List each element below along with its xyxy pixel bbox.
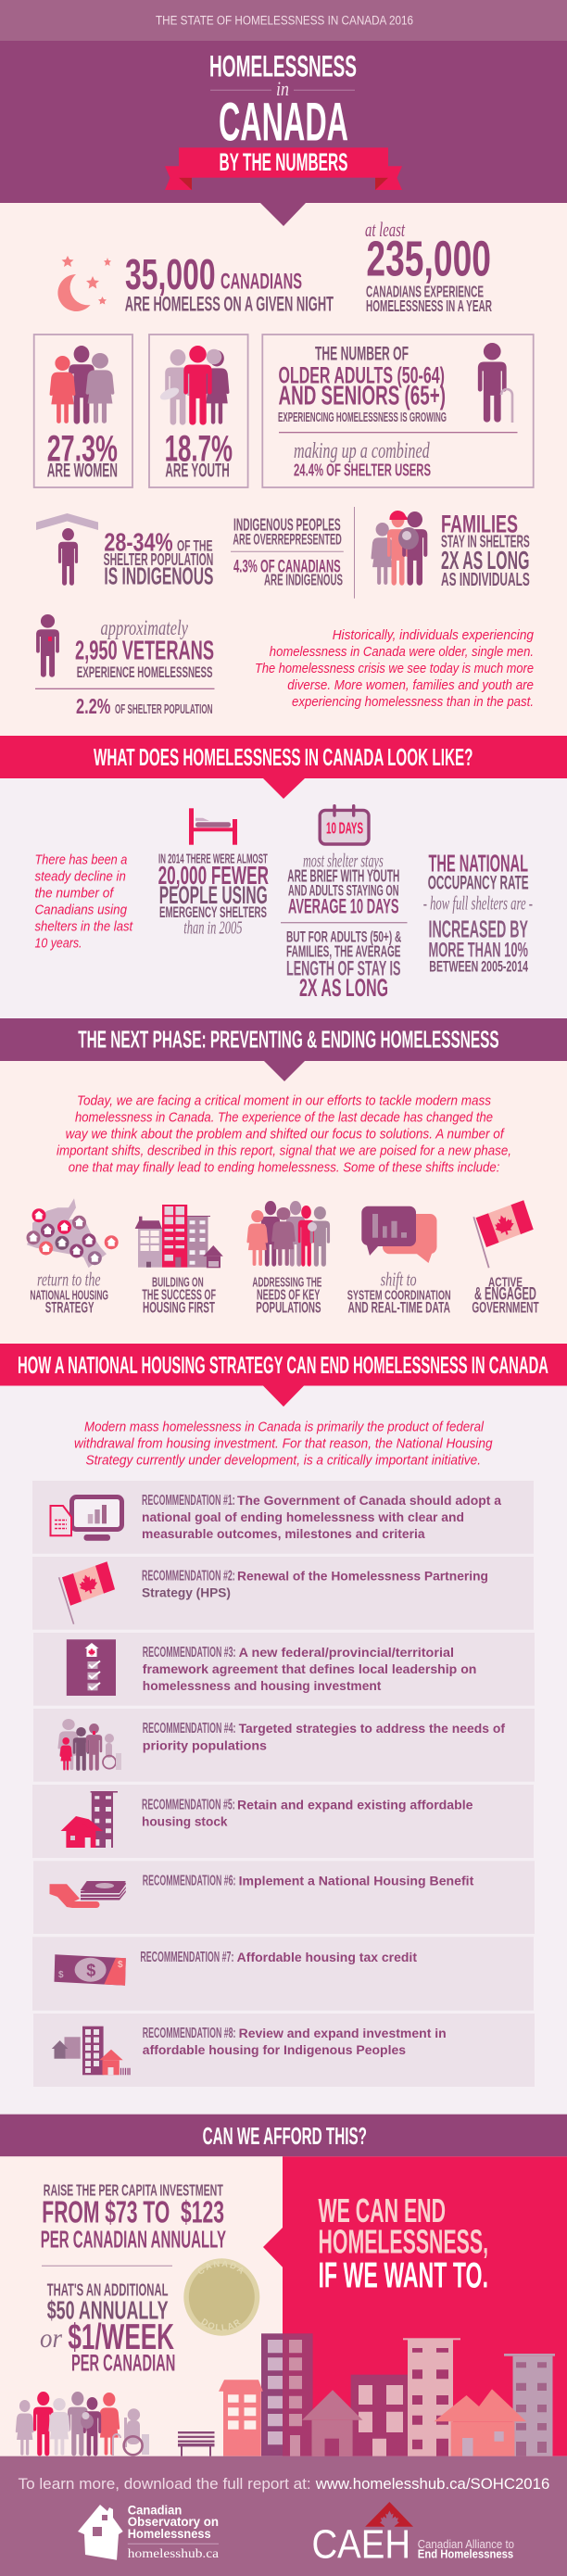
text: recommendation 5 (142, 1797, 473, 1828)
stat: veterans: OF SHELTER POPULATION (115, 702, 213, 717)
panel: older adults and seniors: THE NUMBER OF (315, 344, 409, 365)
text: raise the per capita investment: PER CANADIAN ANNUALLY (41, 2228, 226, 2254)
logo: CAEH: Canadian Alliance to (418, 2537, 514, 2551)
text block: steady decline (35, 853, 133, 952)
label: national housing strategy: NATIONAL HOUSING (30, 1289, 108, 1304)
text: recommendation 3 (143, 1645, 476, 1693)
label: active and engaged government: ACTIVE (488, 1274, 523, 1290)
panel: older adults and seniors (262, 335, 534, 487)
top banner: report name (0, 0, 567, 41)
text: recommendation 8: RECOMMENDATION #8: (143, 2026, 235, 2041)
icon: Canada map with house pins (26, 1198, 119, 1268)
icon: three women (50, 346, 114, 424)
panel: older adults and seniors: 24.4% OF SHELTER USERS (294, 460, 431, 479)
text: recommendation 7: RECOMMENDATION #7: (140, 1950, 233, 1965)
panel: older adults and seniors: AND SENIORS (65+) (278, 382, 446, 411)
text block: historically: The homelessness crisis we see today is much more (255, 662, 534, 676)
text: recommendation 6 (143, 1873, 474, 1888)
stat: indigenous overrepresented: ARE OVERREPRESENTED (233, 531, 342, 548)
label: national housing strategy: return to the (37, 1269, 100, 1291)
heading: can we afford this: CAN WE AFFORD THIS? (203, 2122, 367, 2150)
icon: Canada dollar coin: CANADA (198, 2261, 243, 2274)
panel: youth: 18.7% (165, 428, 233, 469)
label: housing first: HOUSING FIRST (143, 1299, 215, 1317)
stat: 235,000 in a year: 235,000 (366, 231, 491, 286)
label: key populations: POPULATIONS (256, 1299, 321, 1317)
stat: 20,000 fewer people: IN 2014 THERE WERE ALMOST (158, 852, 268, 867)
slogan: we can end homelessness (319, 2191, 488, 2295)
call to action link: www.homelesshub.ca/SOHC2016 (315, 2475, 549, 2493)
text: additional cost: or (40, 2323, 62, 2354)
slogan: we can end homelessness: WE CAN END (319, 2191, 446, 2229)
icon: bed (189, 808, 237, 845)
heading: can we afford this (0, 2115, 567, 2156)
panel: women (34, 335, 132, 487)
panel: older adults and seniors: OLDER ADULTS (50-64) (278, 362, 445, 388)
text block: modern mass homelessness: Strategy currently under development, is a critically important initiative. (85, 1453, 481, 1468)
stat: shelter stays: FAMILIES, THE AVERAGE (286, 941, 401, 960)
call to action link: To learn more, download the full report at: (19, 2475, 311, 2493)
icon: senior with cane (478, 343, 512, 423)
panel: recommendation 6 (33, 1861, 535, 1934)
stat: national occupancy rate (423, 850, 533, 976)
panel: recommendation 2 (32, 1557, 534, 1630)
stat: indigenous shelter population: OF THE (177, 537, 213, 554)
stat: shelter stays (281, 850, 408, 1002)
text: raise the per capita investment: RAISE THE PER CAPITA INVESTMENT (44, 2180, 223, 2199)
text: recommendation 3: RECOMMENDATION #3: (143, 1645, 235, 1661)
icon: indigenous housing buildings (52, 2027, 130, 2075)
logo: CAEH: End Homelessness (418, 2547, 513, 2561)
text block: critical moment: one that may finally lead to ending homelessness. Some of these shifts include: (69, 1161, 499, 1176)
text: recommendation 1: measurable outcomes, milestones and criteria (142, 1527, 425, 1541)
logo: Canadian Observatory on Homelessness: homelesshub.ca (128, 2546, 219, 2560)
icon: buildings (135, 1205, 223, 1268)
panel: cost callout on pink (0, 2156, 567, 2456)
text: raise the per capita investment (41, 2180, 226, 2254)
stat: families stay twice as long (441, 511, 530, 590)
title text: in (276, 77, 289, 100)
label: key populations: NEEDS OF KEY (257, 1287, 321, 1303)
logo: Canadian Observatory on Homelessness: Observatory on (128, 2514, 219, 2529)
text block: critical moment: Today, we are facing a critical moment in our efforts to tackle modern mass (77, 1094, 491, 1109)
text: recommendation 1: national goal of ending homelessness with clear and (142, 1510, 464, 1524)
label: housing first: THE SUCCESS OF (142, 1287, 216, 1303)
stat: indigenous shelter population: IS INDIGENOUS (104, 562, 213, 590)
text block: historically: Historically, individuals experiencing (333, 628, 534, 643)
stat: veterans: EXPERIENCE HOMELESSNESS (77, 663, 213, 681)
stat: 235,000 in a year: CANADIANS EXPERIENCE (366, 283, 484, 301)
stat: veterans (35, 614, 215, 718)
text block: historically (255, 628, 534, 710)
label: system coordination: AND REAL-TIME DATA (348, 1299, 450, 1317)
stat: indigenous shelter population: 28-34% (104, 527, 173, 556)
stat: veterans: approximately (100, 616, 189, 639)
text: additional cost: $50 ANNUALLY (47, 2296, 169, 2325)
icon: checklist (67, 1639, 116, 1696)
text block: steady decline: There has been a (35, 853, 127, 868)
illustration: city skyline (219, 2333, 555, 2456)
label: housing first: BUILDING ON (152, 1275, 204, 1290)
stat: 35,000 on a given night: CANADIANS (220, 270, 302, 295)
stat: 35,000 on a given night: 35,000 (125, 250, 216, 298)
logo: CAEH (311, 2502, 514, 2568)
stat: shelter stays: BUT FOR ADULTS (50+) & (286, 928, 401, 946)
text: recommendation 3: framework agreement that defines local leadership on (143, 1662, 476, 1676)
ribbon: by the numbers (165, 147, 402, 190)
text block: steady decline: shelters in the last (35, 920, 133, 935)
text: recommendation 2: Strategy (HPS) (142, 1586, 231, 1600)
icon: hand with money (50, 1881, 126, 1908)
text: recommendation 4: Targeted strategies to address the needs of (239, 1722, 506, 1736)
icon: family (371, 511, 427, 586)
text: additional cost: PER CANADIAN (71, 2352, 175, 2377)
text: recommendation 7: Affordable housing tax credit (237, 1951, 418, 1964)
text block: modern mass homelessness: withdrawal from housing investment. For that reason, the National Housing (74, 1436, 493, 1451)
stat: 20,000 fewer people: than in 2005 (183, 918, 243, 939)
text: additional cost: THAT'S AN ADDITIONAL (47, 2279, 169, 2299)
icon: key populations group (246, 1201, 330, 1267)
stat: indigenous shelter population (36, 513, 213, 590)
text: recommendation 2: RECOMMENDATION #2: (142, 1569, 235, 1585)
text: recommendation 3: homelessness and housing investment (143, 1679, 382, 1693)
call to action link (19, 2475, 549, 2493)
text: recommendation 8: Review and expand investment in (239, 2027, 447, 2040)
text block: historically: experiencing homelessness than in the past. (292, 695, 534, 710)
icon: torn banknote: $ (58, 1970, 64, 1980)
text block: modern mass homelessness (74, 1420, 493, 1468)
panel: recommendation 4 (33, 1709, 535, 1782)
title text: HOMELESSNESS (209, 50, 357, 83)
logo: Canadian Observatory on Homelessness (78, 2502, 219, 2560)
stat: indigenous shelter population: SHELTER POPULATION (104, 549, 213, 569)
logo: CAEH: CAEH (311, 2523, 410, 2568)
icon: flag (59, 1561, 115, 1624)
stat: veterans: 2.2% (76, 694, 110, 718)
stat: indigenous overrepresented: ARE INDIGENOUS (264, 570, 343, 588)
text: recommendation 2 (142, 1569, 488, 1600)
text: additional cost: $1/WEEK (68, 2317, 174, 2357)
text: recommendation 4: priority populations (143, 1738, 267, 1752)
label: housing first (142, 1275, 216, 1317)
stat: 20,000 fewer people: EMERGENCY SHELTERS (159, 903, 267, 921)
label: system coordination: SYSTEM COORDINATION (347, 1288, 451, 1304)
text: recommendation 5: RECOMMENDATION #5: (142, 1797, 235, 1812)
text: recommendation 4: RECOMMENDATION #4: (143, 1721, 235, 1736)
stat: shelter stays: AVERAGE 10 DAYS (288, 895, 398, 918)
text: additional cost (40, 2279, 175, 2377)
stat: shelter stays: LENGTH OF STAY IS (286, 956, 400, 979)
stat: indigenous overrepresented (231, 515, 344, 588)
icon: monitor and document (50, 1497, 122, 1541)
stat: 20,000 fewer people (158, 852, 269, 939)
panel: youth (149, 335, 248, 487)
title text (209, 50, 357, 153)
text block: historically: homelessness in Canada were older, single men. (270, 645, 534, 660)
text: recommendation 6: RECOMMENDATION #6: (143, 1873, 235, 1888)
panel: older adults and seniors: making up a combined (294, 439, 430, 463)
icon: calendar 10 days: 10 DAYS (326, 818, 363, 837)
icon: Canada dollar coin (183, 2258, 259, 2336)
icon: speech bubbles with chart (361, 1206, 437, 1263)
footer (0, 2456, 567, 2576)
stat: 235,000 in a year: at least (365, 218, 406, 241)
icon: torn banknote: $ (86, 1961, 95, 1979)
heading: national housing strategy (0, 1344, 567, 1407)
text: recommendation 7 (140, 1950, 418, 1965)
panel: youth: ARE YOUTH (165, 460, 230, 481)
text block: critical moment: homelessness in Canada. The experience of the last decade has changed the (75, 1111, 493, 1126)
logo: Canadian Observatory on Homelessness: Homelessness (128, 2526, 211, 2541)
icon: Canadian flag (473, 1200, 534, 1268)
text block: critical moment: important shifts, described in this report, signal that we are poised for a new phase, (57, 1144, 511, 1159)
label: key populations (252, 1275, 322, 1317)
stat: veterans: 2,950 VETERANS (75, 637, 214, 666)
text: recommendation 1: The Government of Canada should adopt a (237, 1494, 502, 1508)
text block: steady decline: the number of (35, 887, 115, 902)
stat: 35,000 on a given night (125, 250, 334, 315)
text: recommendation 8: affordable housing for Indigenous Peoples (143, 2043, 406, 2057)
text: recommendation 5: Retain and expand existing affordable (237, 1798, 473, 1812)
stat: shelter stays: ARE BRIEF WITH YOUTH (287, 867, 399, 886)
panel: recommendation 8 (33, 2014, 535, 2087)
text: recommendation 8 (143, 2026, 447, 2057)
panel: recommendation 5 (32, 1785, 534, 1858)
icon: Canada dollar coin: DOLLAR (201, 2318, 241, 2330)
label: national housing strategy: STRATEGY (45, 1299, 94, 1317)
panel: recommendation 3 (33, 1633, 535, 1706)
title text: CANADA (219, 93, 348, 153)
text block: historically: diverse. More women, families and youth are (287, 678, 534, 693)
text: recommendation 4 (143, 1721, 506, 1752)
text: recommendation 1 (142, 1493, 502, 1541)
text block: steady decline: steady decline in (35, 870, 126, 885)
text block: critical moment (57, 1094, 511, 1176)
ribbon: by the numbers: BY THE NUMBERS (219, 148, 348, 176)
text: recommendation 6: Implement a National Housing Benefit (239, 1874, 474, 1888)
text: recommendation 1: RECOMMENDATION #1: (142, 1493, 235, 1509)
stat: 20,000 fewer people: PEOPLE USING (159, 881, 268, 909)
icon: torn banknote (54, 1954, 126, 1986)
text block: modern mass homelessness: Modern mass homelessness in Canada is primarily the product of federal (84, 1420, 485, 1434)
icon: tower and houses (61, 1791, 118, 1848)
stat: indigenous overrepresented: 4.3% OF CANADIANS (233, 556, 341, 576)
panel: women: 27.3% (47, 428, 118, 469)
illustration: group of people (16, 2392, 149, 2456)
text: raise the per capita investment: FROM $73 TO $123 (42, 2195, 224, 2229)
stat: 20,000 fewer people: 20,000 FEWER (158, 861, 269, 890)
top banner: report name: THE STATE OF HOMELESSNESS IN CANADA 2016 (156, 14, 413, 28)
text: recommendation 2: Renewal of the Homelessness Partnering (237, 1570, 488, 1584)
label: national housing strategy (30, 1269, 108, 1317)
title header (0, 41, 567, 226)
stat: shelter stays: most shelter stays (303, 850, 384, 872)
panel: recommendation 1 (32, 1481, 534, 1554)
icon: torn banknote: $ (118, 1960, 123, 1970)
label: system coordination (347, 1269, 451, 1317)
text: recommendation 3: A new federal/provincial/territorial (239, 1646, 454, 1660)
icon: calendar 10 days (320, 804, 369, 844)
text: recommendation 5: housing stock (142, 1814, 228, 1828)
label: key populations: ADDRESSING THE (252, 1275, 322, 1290)
stat: indigenous overrepresented: INDIGENOUS PEOPLES (233, 515, 341, 535)
logo: Canadian Observatory on Homelessness: Canadian (128, 2502, 182, 2517)
label: system coordination: shift to (381, 1269, 417, 1291)
text block: steady decline: 10 years. (35, 937, 82, 952)
panel: women: ARE WOMEN (47, 460, 118, 481)
label: active and engaged government (472, 1274, 539, 1317)
icon: three youth (158, 346, 229, 425)
stat: 35,000 on a given night: ARE HOMELESS ON A GIVEN NIGHT (125, 292, 334, 315)
stat: shelter stays: 2X AS LONG (299, 974, 388, 1002)
icon: priority populations (57, 1719, 121, 1771)
panel: recommendation 7 (32, 1937, 534, 2011)
heading: what does homelessness look like (0, 736, 567, 799)
icon: bench (178, 2431, 215, 2456)
text block: steady decline: Canadians using (35, 903, 127, 918)
stat: 235,000 in a year (365, 218, 492, 315)
icon: moon and stars (57, 256, 111, 311)
stat: shelter stays: AND ADULTS STAYING ON (288, 882, 398, 900)
stat: families stay twice as long: FAMILIES (441, 511, 518, 538)
heading: the next phase (0, 1018, 567, 1081)
text block: critical moment: way we think about the problem and shifted our focus to solutions. A number of (66, 1128, 505, 1143)
